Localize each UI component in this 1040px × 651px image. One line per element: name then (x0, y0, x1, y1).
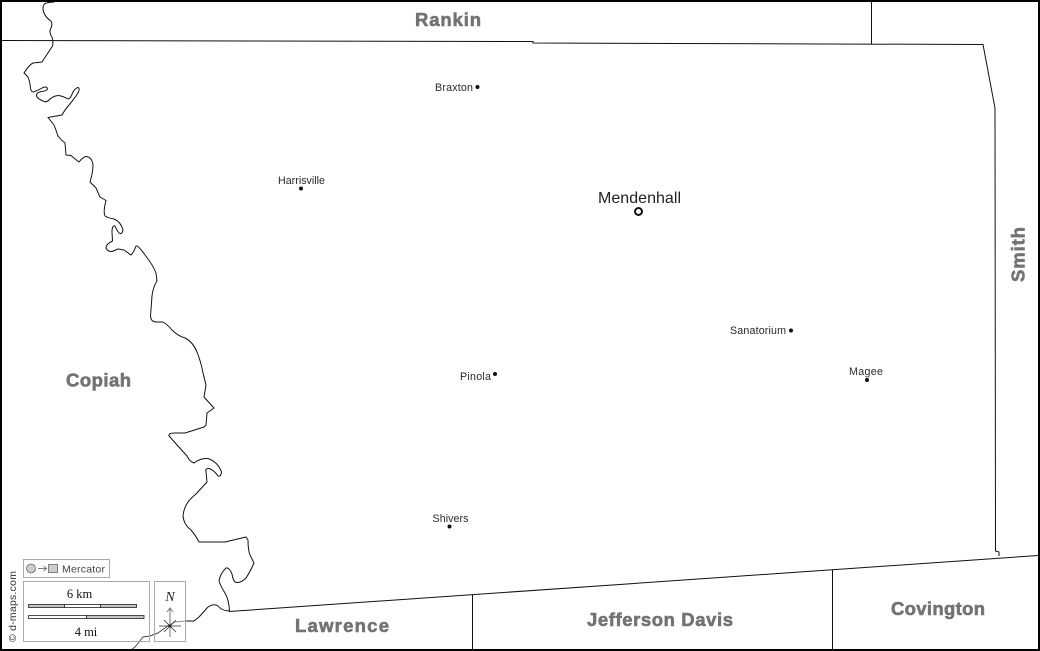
county label: Jefferson Davis: Jefferson Davis (587, 609, 733, 630)
north compass (154, 582, 186, 642)
town: Braxton: Braxton (435, 82, 473, 94)
projection legend: Mercator (24, 560, 110, 578)
projection legend: Mercator: Mercator (62, 564, 106, 576)
river boundary: west side (24, 2, 254, 611)
scale bar: 4 mi (75, 625, 98, 639)
town: Shivers: Shivers (432, 513, 468, 525)
town: Magee: Magee (849, 366, 883, 378)
scale bar (24, 582, 150, 642)
river boundary: southwest tail (186, 605, 230, 621)
scale bar: 6 km (67, 587, 92, 601)
copyright: © d-maps.com (7, 571, 19, 642)
county seat: Mendenhall (598, 190, 681, 215)
county seat: Mendenhall: Mendenhall (598, 190, 681, 207)
north compass: N (164, 590, 175, 605)
county label: Rankin: Rankin (415, 9, 481, 30)
town: Harrisville: Harrisville (278, 175, 325, 187)
county label: Lawrence: Lawrence (295, 615, 389, 636)
county label: Smith: Smith (1008, 227, 1028, 282)
town: Sanatorium: Sanatorium (730, 325, 786, 337)
county label: Copiah: Copiah (66, 370, 131, 390)
county label: Covington: Covington (891, 598, 985, 619)
town: Pinola: Pinola (460, 371, 491, 383)
